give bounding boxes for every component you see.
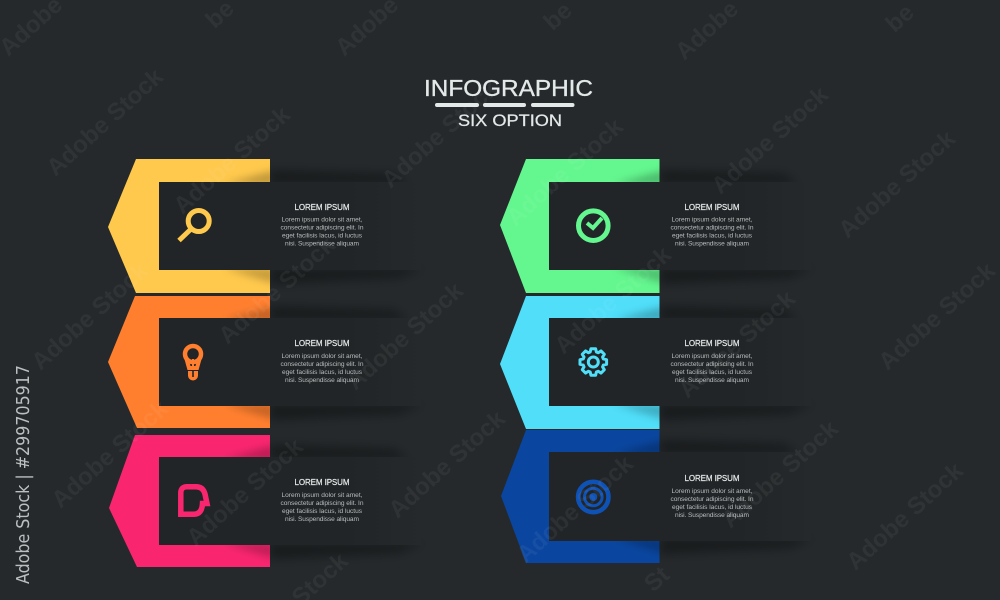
yellow arrow band [108,159,270,293]
panel: pink document option [109,435,424,567]
icon: magnifier [179,210,209,240]
stock watermark pattern: Adobe Stock [41,63,169,182]
yellow option text [280,203,364,248]
icon: gear [580,349,607,375]
cyan option text: eget facilisis lacus, id luctus [672,369,753,376]
panel: green check option [500,159,814,293]
pink arrow band [109,435,270,567]
orange option text: eget facilisis lacus, id luctus [282,369,363,376]
stock watermark pattern: St [639,561,675,597]
stock watermark pattern: Adobe Stock [673,285,801,404]
cyan arrow band [500,296,660,429]
title block [424,75,593,130]
panel: cyan gear option [500,296,814,429]
cyan option text: LOREM IPSUM [684,339,740,348]
pink option text [280,478,364,523]
orange text panel [159,318,421,406]
stock watermark pattern: Adobe Stock [873,257,1000,376]
pink option text: eget facilisis lacus, id luctus [282,508,363,515]
pink option text: consectetur adipiscing elit. In [280,500,364,507]
yellow option text: consectetur adipiscing elit. In [280,224,364,232]
stock watermark pattern: Adobe Stock [501,113,629,232]
cyan option text [670,339,754,384]
yellow option text: eget facilisis lacus, id luctus [282,232,363,240]
stock watermark pattern: Adobe Stock [706,81,834,200]
stock watermark pattern: Adobe Stock [213,231,341,350]
icon: light bulb [185,346,201,380]
icon: check circle [578,211,608,240]
stock watermark pattern: be [881,0,919,38]
green option text [670,203,754,248]
green arrow band [500,159,660,293]
title: infographic: INFOGRAPHIC [424,75,593,101]
navy option text: LOREM IPSUM [684,474,740,483]
stock watermark pattern: Adobe Stock [168,101,296,220]
green option text: LOREM IPSUM [684,203,740,212]
panel: yellow search option [108,159,424,293]
orange option text: Lorem ipsum dolor sit amet, [282,353,363,360]
cyan option text: nisi. Suspendisse aliquam [675,377,750,384]
stock watermark pattern: Adobe Stock [833,125,961,244]
green option text: nisi. Suspendisse aliquam [675,240,750,248]
green option text: Lorem ipsum dolor sit amet, [672,216,753,224]
stock watermark pattern: Adobe Stock [46,395,174,514]
navy option text: Lorem ipsum dolor sit amet, [672,488,753,495]
cyan text panel [549,318,811,406]
orange option text: nisi. Suspendisse aliquam [285,377,360,384]
yellow option text: nisi. Suspendisse aliquam [285,240,360,248]
navy option text: consectetur adipiscing elit. In [670,496,754,503]
green option text: consectetur adipiscing elit. In [670,224,754,232]
yellow text panel [159,182,421,270]
pink option text: LOREM IPSUM [294,478,350,487]
stock watermark pattern: Adobe Stock [376,75,504,194]
stock id side label: Adobe Stock | #299705917 [13,365,34,584]
cyan option text: Lorem ipsum dolor sit amet, [672,353,753,360]
panel: orange idea option [108,296,424,428]
navy arrow band [501,430,660,563]
panel: navy target option [501,430,814,563]
navy option text: nisi. Suspendisse aliquam [675,512,750,519]
yellow option text: Lorem ipsum dolor sit amet, [282,216,363,224]
stock watermark pattern: Adobe Stock [716,415,844,534]
yellow option text: LOREM IPSUM [294,203,350,212]
navy text panel [549,452,811,541]
orange option text: consectetur adipiscing elit. In [280,361,364,368]
stock watermark pattern: Adobe Stock [841,457,969,576]
pink text panel [159,457,421,545]
title divider bars [435,103,574,107]
subtitle: six option: SIX OPTION [458,112,562,130]
navy option text [670,474,754,519]
stock watermark pattern: Adobe Stock [26,257,154,376]
pink option text: Lorem ipsum dolor sit amet, [282,492,363,499]
green option text: eget facilisis lacus, id luctus [672,232,753,240]
cyan option text: consectetur adipiscing elit. In [670,361,754,368]
orange option text [280,339,364,384]
navy option text: eget facilisis lacus, id luctus [672,504,753,511]
stock watermark pattern: Adobe Stock [549,241,677,360]
stock watermark pattern: Adobe Stock [383,405,511,524]
icon: document shape [181,487,207,514]
green text panel [549,182,811,270]
orange option text: LOREM IPSUM [294,339,350,348]
stock watermark pattern: Adobe Stock [341,277,469,396]
stock watermark pattern: Adobe Stock [181,433,309,552]
stock watermark pattern: Adobe Stock [511,450,639,569]
orange arrow band [108,296,270,428]
icon: target [578,482,608,512]
pink option text: nisi. Suspendisse aliquam [285,516,360,523]
